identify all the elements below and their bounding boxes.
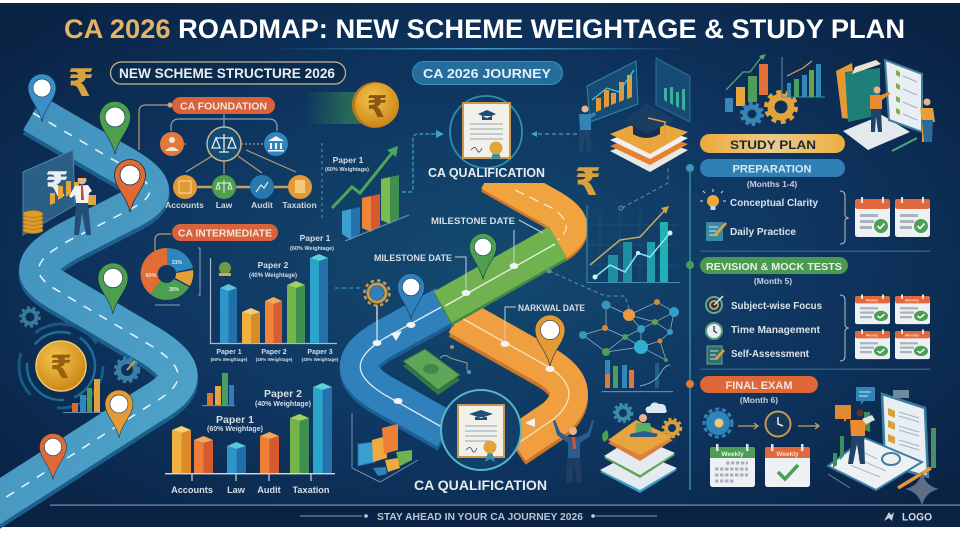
bar chart: papers: [210, 254, 337, 344]
text: self-assessment: Self-Assessment: [731, 348, 809, 360]
gold gear: [766, 92, 796, 122]
label: paper 1: [207, 414, 263, 433]
node: law: [212, 175, 236, 199]
icon: gear left: [20, 308, 40, 326]
text: subject-wise focus: Subject-wise Focus: [731, 300, 822, 312]
CA qualification label bottom: CA QUALIFICATION: [414, 478, 547, 493]
pin: green: [100, 102, 130, 154]
icon: clock: [706, 323, 722, 339]
timeline rail: [689, 168, 691, 490]
chart label: paper 2 top: Paper 2: [258, 260, 289, 270]
weekly calendar orange: [765, 444, 810, 487]
arrow: [738, 423, 758, 429]
chart axis labels: Paper 1: [216, 349, 242, 356]
icon: small money: [219, 262, 231, 276]
study plan pill: [700, 134, 845, 153]
revision pill: [686, 257, 848, 274]
center road: green section: [443, 242, 558, 310]
foundation subject labels: Taxation: [282, 200, 317, 210]
label: paper 1: Paper 1: [216, 414, 254, 426]
foundation subject labels: [165, 200, 317, 210]
glowing line chart: [587, 205, 680, 282]
icon: clipboard pen: [707, 346, 725, 364]
final exam month: (Month 6): [740, 395, 778, 405]
brace: [840, 295, 848, 361]
network bars: [602, 360, 673, 392]
weekly calendar orange: Weekly: [776, 451, 799, 458]
label: paper 1 upper: [325, 155, 369, 173]
arrow: [798, 423, 819, 429]
new scheme structure heading: [110, 62, 346, 84]
pin: center orange: [535, 315, 565, 366]
text: time management: Time Management: [731, 324, 820, 336]
book stack with reader: [600, 414, 677, 493]
preparation pill: PREPARATION: [732, 164, 812, 176]
label: milestone date 2: MILESTONE DATE: [374, 253, 452, 264]
mini bars left: [63, 379, 103, 413]
dashed arrow to qualification: [402, 130, 444, 192]
node: center scales: [207, 127, 241, 161]
pin: gold: [105, 390, 133, 438]
small calendar captions: Monthly: [905, 334, 919, 338]
donut chart: [141, 248, 200, 305]
connector to foundation: [139, 103, 172, 150]
label: paper 2: [255, 388, 311, 408]
pin: second green: [98, 263, 128, 314]
study plan pill: STUDY PLAN: [730, 138, 816, 152]
icon: rupee screen and coins: [23, 150, 96, 235]
pin: red-orange: [40, 434, 66, 479]
chart label: paper 1 top: (60% Weightage): [290, 246, 334, 252]
certificate bottom: [441, 390, 521, 470]
subject axis labels: Accounts: [171, 485, 213, 495]
calendar weekly 2: [855, 330, 890, 359]
figure: man arms raised: [553, 420, 594, 483]
brace: [840, 191, 848, 244]
gold coin and banknote: [305, 82, 399, 128]
small calendar captions: Weekly: [866, 298, 878, 302]
mini chart right: [782, 57, 825, 97]
banknote stack: [403, 345, 471, 395]
label: paper 2: Paper 2: [264, 388, 302, 400]
bottom rule: [50, 504, 960, 506]
network graph: [579, 299, 679, 362]
calendar 1: [855, 197, 890, 237]
donut chart: 21%: [172, 260, 183, 266]
icon: gear blue right: [614, 404, 632, 422]
books with graduation cap: [610, 103, 688, 172]
label: paper 1 upper: Paper 1: [333, 155, 364, 165]
top right growth chart: [725, 54, 768, 112]
blue gear: [742, 104, 762, 124]
footer slogan: STAY AHEAD IN YOUR CA JOURNEY 2026: [377, 512, 583, 523]
CA 2026 journey pill: CA 2026 JOURNEY: [423, 66, 551, 81]
preparation pill: [686, 159, 845, 177]
left coin with arcs: ₹: [50, 349, 72, 385]
chart label: paper 2 top: (40% Weightage): [249, 273, 297, 279]
books and checklist illustration: [836, 60, 935, 151]
preparation months: (Months 1-4): [747, 179, 797, 189]
final exam pill: FINAL EXAM: [726, 380, 792, 392]
center road: blue section: [359, 305, 447, 434]
center road: orange section: [490, 173, 570, 247]
logo: LOGO: [902, 512, 932, 524]
text: conceptual clarity: Conceptual Clarity: [730, 197, 818, 209]
subject axis labels: Law: [227, 485, 246, 495]
figure: presenter: [579, 106, 596, 153]
pin: center blue: [398, 274, 424, 319]
revision month: (Month 5): [754, 276, 792, 286]
mini bars middle: [202, 373, 235, 406]
CA 2026 journey pill: [412, 62, 562, 84]
icon: notepad: [706, 222, 727, 241]
icon: rupee outline: ₹: [575, 162, 601, 204]
chart axis labels: Paper 2: [261, 349, 287, 356]
chart axis labels: [211, 349, 339, 362]
foundation subject labels: Audit: [251, 200, 273, 210]
node: bank: [264, 132, 288, 156]
footer slogan: [300, 512, 657, 523]
CA qualification label top: CA QUALIFICATION: [428, 166, 545, 180]
chart axis labels: Paper 3: [307, 349, 333, 356]
left coin with arcs: [19, 324, 103, 408]
icon: gear gold right: [663, 419, 681, 437]
label: paper 1: (60% Weightage): [207, 426, 263, 433]
small calendar captions: [866, 298, 919, 338]
subject axis labels: Audit: [257, 485, 281, 495]
road arrows: [391, 331, 535, 427]
weekly calendar green: Weekly: [721, 451, 744, 458]
calendar monthly 2: [895, 330, 930, 359]
node: accounts: [173, 175, 197, 199]
star watermark: [905, 472, 939, 506]
foundation tree: [160, 114, 317, 210]
title: CA 2026 ROADMAP: NEW SCHEME WEIGHTAGE & STUDY PLAN: [64, 14, 905, 44]
pin: center green: [470, 234, 496, 279]
icon: target: [706, 296, 723, 313]
connector to intermediate: [155, 234, 171, 254]
icon: rupee glyph: ₹: [68, 63, 94, 105]
3D bars bottom: [352, 413, 418, 482]
small calendar captions: Weekly: [866, 334, 878, 338]
icon: bulb: [700, 189, 726, 210]
icon: cloud: [646, 402, 667, 413]
new scheme structure heading: NEW SCHEME STRUCTURE 2026: [119, 66, 335, 81]
chart axis labels: (60% Weightage): [211, 357, 248, 362]
weekly calendar green: [710, 444, 755, 487]
donut chart: 30%: [169, 287, 180, 293]
rising bars and arrow: [332, 146, 409, 241]
analytics screens: [587, 58, 690, 122]
calendar 2: [895, 197, 930, 237]
chart axis labels: (40% Weightage): [302, 357, 339, 362]
subject axis labels: [171, 485, 330, 495]
label: national date: NARKWAL DATE: [518, 303, 585, 314]
label: paper 2: (40% Weightage): [255, 401, 311, 408]
dashed arrow from books: [531, 131, 577, 137]
CA intermediate pill: [172, 224, 278, 241]
revision pill: REVISION & MOCK TESTS: [706, 261, 842, 273]
certificate top: [450, 96, 522, 168]
icon: clock: [766, 412, 790, 436]
chart label: paper 1 top: Paper 1: [300, 233, 331, 243]
pin: blue: [28, 74, 56, 122]
figure: businessman: [69, 175, 92, 235]
text: daily practice: Daily Practice: [730, 226, 796, 238]
CA foundation pill: CA FOUNDATION: [180, 100, 267, 112]
CA foundation pill: [172, 97, 275, 114]
divider dashed: [321, 143, 323, 220]
dashed connector: [619, 167, 668, 210]
calendar weekly 1: [855, 295, 890, 324]
small calendar captions: Monthly: [905, 298, 919, 302]
milestone dots: [372, 263, 554, 404]
dashed link to gear: [335, 287, 360, 289]
chart label: paper 2 top: [249, 260, 297, 279]
gold coin and banknote: ₹: [367, 91, 387, 124]
foundation subject labels: Accounts: [165, 200, 204, 210]
foundation subject labels: Law: [216, 200, 233, 210]
subject axis labels: Taxation: [292, 485, 330, 495]
icon: gear blob: [704, 409, 732, 437]
node: audit: [250, 175, 274, 199]
donut chart: 60%: [145, 273, 157, 279]
chart axis labels: (40% Weightage): [256, 357, 293, 362]
milestone connectors: [377, 220, 543, 344]
icon: gear center: [364, 280, 390, 306]
icon: rupee screen and coins: ₹: [45, 166, 69, 204]
CA intermediate pill: CA INTERMEDIATE: [178, 228, 272, 240]
logo: [884, 512, 932, 524]
pin: orange: [114, 160, 146, 212]
bar chart: subjects: [165, 383, 335, 481]
node: taxation: [288, 175, 312, 199]
calendar monthly 1: [895, 295, 930, 324]
icon: gear speed: [115, 358, 139, 382]
node: people: [160, 132, 184, 156]
final exam pill: [686, 376, 818, 393]
chart label: paper 1 top: [290, 233, 334, 252]
dashed connector to network: [547, 269, 630, 312]
left winding road: [0, 113, 178, 514]
lower orange road: [458, 316, 569, 449]
label: milestone date 1: MILESTONE DATE: [431, 216, 515, 227]
label: paper 1 upper: (60% Weightage): [325, 167, 369, 173]
checklist illustration: [828, 387, 936, 490]
